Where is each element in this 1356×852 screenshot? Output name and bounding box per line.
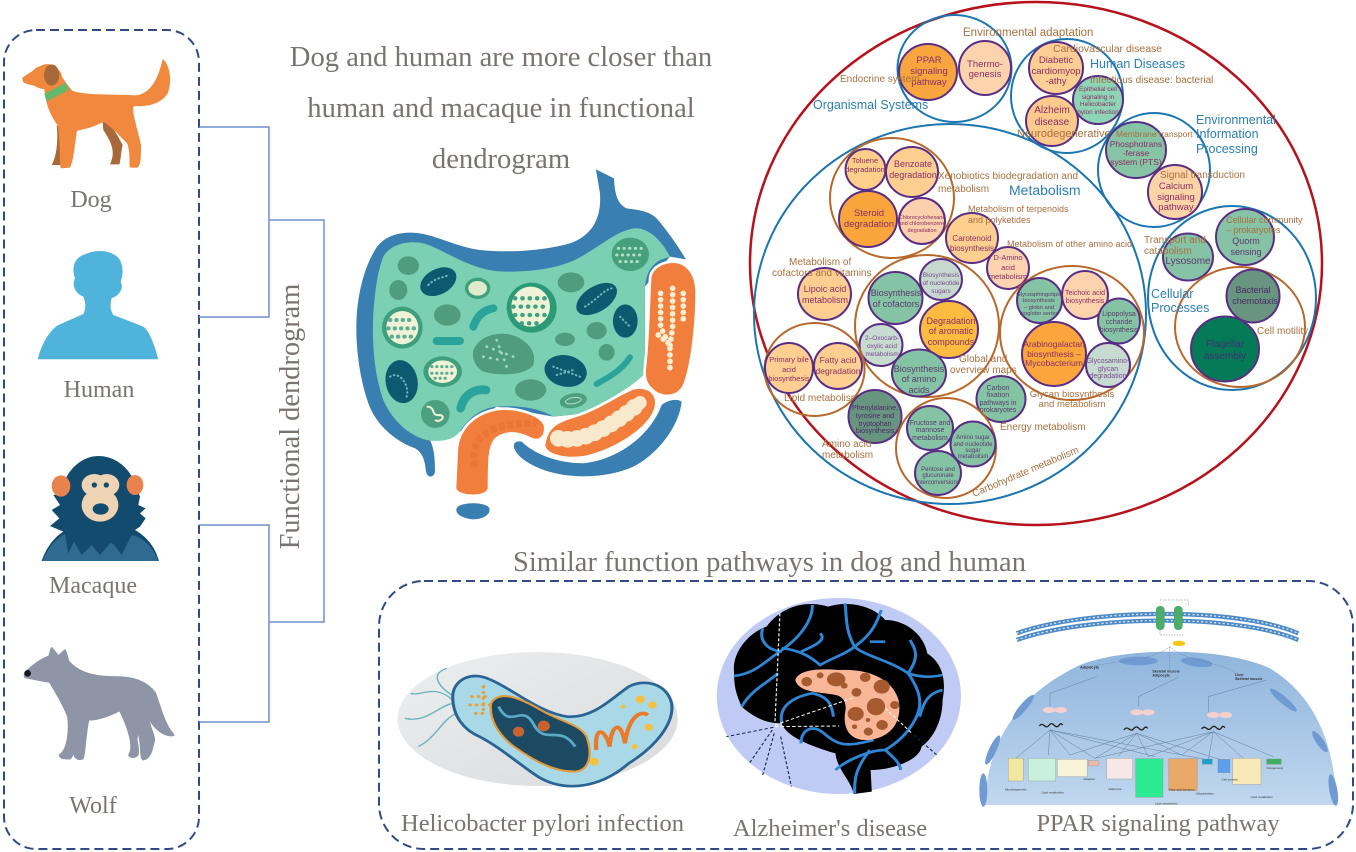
sub-group: global and overview maps: sugars (931, 288, 952, 295)
group: cellular processes: Quorm (1232, 236, 1260, 246)
sub-group: terpenoids and other amino acids: Metabolism of terpenoids (968, 204, 1069, 214)
sub-group: cofactors and vitamins: Lipoic acid (804, 284, 846, 294)
group: human diseases: Neurodegenerative (1017, 128, 1111, 140)
sub-group: carbohydrate metabolism: glucuronate (922, 473, 954, 479)
group: human diseases: Diabetic (1039, 55, 1073, 66)
group: organismal systems: Organismal Systems (813, 98, 928, 112)
group: cellular processes: Cell motility (1257, 326, 1308, 337)
sub-group: amino acid metabolism: metabolism (822, 450, 873, 461)
heading: similar function pathways: Similar function pathways in dog and human (513, 547, 1026, 578)
sub-group: terpenoids and other amino acids: Metabolism of other amino acid (1007, 239, 1132, 249)
sub-group: global and overview maps: Degradation (926, 316, 976, 326)
group: cellular processes (1144, 206, 1316, 390)
sub-group: glycan biosynthesis and metabolism: biosynthesis (1100, 327, 1139, 334)
sub-group: xenobiotics: degradation (889, 170, 937, 180)
group: environmental information processing: Membrane transport (1116, 129, 1193, 139)
group: cellular processes: catabolism (1144, 246, 1192, 257)
group: organismal systems: pathway (911, 77, 947, 88)
sub-group: carbohydrate metabolism: Fructose and (910, 420, 951, 427)
illustration: PPAR signaling pathway: Microbiogenesis (1005, 788, 1027, 792)
sub-group: terpenoids and other amino acids: Carotenoid (952, 234, 992, 243)
sub-group: glycan biosynthesis and metabolism: ccharide (1106, 319, 1132, 326)
title: dendrogram (432, 144, 570, 175)
illustration: PPAR signaling pathway: Adipocyte (1152, 674, 1170, 678)
illustration: PPAR signaling pathway: Adipocyte (1080, 664, 1100, 669)
sub-group: glycan biosynthesis and metabolism: – globo and (1024, 305, 1054, 311)
label: Wolf: Wolf (69, 793, 117, 819)
sub-group: amino acid metabolism: Amino acid (822, 439, 871, 450)
sub-group: amino acid metabolism: biosynthesis (856, 428, 895, 435)
sub-group: carbohydrate metabolism: Carbohydrate metabolism (971, 445, 1081, 500)
sub-group: amino acid metabolism (822, 390, 902, 461)
group: environmental information processing: system (PTS) (1110, 157, 1162, 167)
sub-group: terpenoids and other amino acids: D-Amino (993, 253, 1023, 262)
icon: macaque (42, 456, 159, 561)
illustration: Helicobacter pylori (398, 652, 678, 786)
sub-group: glycan biosynthesis and metabolism: glycan (1098, 366, 1118, 373)
label: Functional dendrogram: Functional dendrogram (275, 284, 306, 549)
sub-group: global and overview maps: compounds (928, 337, 975, 347)
group: human diseases: signaling in (1082, 94, 1115, 101)
sub-group: global and overview maps: overview maps (950, 365, 1017, 376)
group: human diseases: Human Diseases (1090, 57, 1185, 71)
sub-group: amino acid metabolism: tryptophan (858, 421, 892, 428)
sub-group: global and overview maps (855, 255, 1017, 397)
sub-group: lipid metabolism (764, 323, 864, 416)
sub-group: cofactors and vitamins: Metabolism of (789, 257, 851, 268)
group: human diseases: -athy (1045, 76, 1067, 87)
sub-group: glycan biosynthesis and metabolism: Teichoic acid (1065, 290, 1105, 297)
sub-group: xenobiotics (830, 138, 1078, 258)
group: environmental information processing: Signal transduction (1160, 170, 1245, 181)
sub-group: global and overview maps: of aromatic (929, 326, 974, 336)
sub-group: carbohydrate metabolism: Pentose and (921, 467, 955, 473)
sub-group: glycan biosynthesis and metabolism: and metabolism (1038, 399, 1106, 410)
illustration: PPAR signaling pathway: Lipid metabolism (1155, 802, 1178, 806)
sub-group: carbohydrate metabolism: metabolism (912, 435, 948, 442)
illustration: PPAR signaling pathway (979, 600, 1340, 807)
sub-group: cofactors and vitamins: cofactors and vitamins (772, 268, 872, 279)
group: cellular processes: – prokaryotes (1226, 225, 1281, 235)
sub-group: lipid metabolism: Fatty acid (820, 355, 857, 365)
group: environmental information processing: -ferase (1123, 148, 1149, 158)
group: organismal systems: PPAR (916, 55, 942, 66)
sub-group: glycan biosynthesis and metabolism: biosynthesis (1066, 298, 1105, 305)
illustration: PPAR signaling pathway: Liver (1235, 673, 1244, 677)
sub-group: lipid metabolism: acid (782, 365, 796, 374)
sub-group: lipid metabolism: biosynthesis (768, 374, 810, 383)
group: environmental information processing: Information (1196, 127, 1259, 141)
sub-group: xenobiotics: Chlorocyclohexane (899, 215, 945, 221)
illustration: Alzheimer's brain (717, 598, 961, 794)
label: Helicobacter pylori infection: Helicobacter pylori infection (401, 810, 684, 837)
sub-group: glycan biosynthesis and metabolism: Glycosamino- (1087, 358, 1130, 365)
group: environmental information processing (1098, 113, 1276, 227)
sub-group: glycan biosynthesis and metabolism: Arabinogalactan (1023, 339, 1085, 349)
sub-group: glycan biosynthesis and metabolism: biosynthesis (1023, 298, 1055, 304)
illustration: PPAR signaling pathway: Lipid metabolism (1251, 795, 1274, 799)
group: cellular processes: Bacterial (1235, 285, 1271, 295)
group: environmental information processing: Environmental (1196, 113, 1276, 127)
sub-group: glycan biosynthesis and metabolism: biosynthesis – (1027, 349, 1081, 359)
sub-group: carbohydrate metabolism: sugar (965, 448, 981, 454)
group: cellular processes: Lysosome (1165, 256, 1211, 267)
sub-group: global and overview maps: 2–Oxocarb- (865, 335, 899, 342)
icon: human (38, 251, 158, 359)
sub-group: energy metabolism: fixation (987, 392, 1009, 399)
label: Human: Human (64, 377, 134, 403)
group: metabolism: Metabolism (1009, 182, 1081, 198)
sub-group: glycan biosynthesis and metabolism: isoglobo series (1020, 311, 1058, 317)
sub-group: carbohydrate metabolism: and nucleotide (953, 442, 993, 448)
sub-group: energy metabolism: pathways in (980, 400, 1017, 407)
group: human diseases: pylori infection (1077, 109, 1119, 116)
sub-group: glycan biosynthesis and metabolism: Glycan biosynthesis (1030, 389, 1114, 400)
illustration: PPAR signaling pathway: Fatty acid transport (1169, 787, 1195, 791)
sub-group: global and overview maps: of amino (902, 374, 936, 384)
sub-group: global and overview maps: Global and (959, 354, 1007, 365)
sub-group: amino acid metabolism: Phenylalanine, (852, 405, 898, 412)
group: human diseases: cardiomyop (1031, 66, 1081, 77)
sub-group: glycan biosynthesis and metabolism: Glycosphingolipid (1016, 292, 1062, 298)
sub-group: xenobiotics: Benzoate (894, 159, 932, 169)
illustration: PPAR signaling pathway: Cell survival (1222, 778, 1238, 782)
group: cellular processes: assembly (1204, 351, 1246, 362)
sub-group: glycan biosynthesis and metabolism: Mycobacterium (1025, 358, 1083, 368)
group: organismal systems (813, 15, 1093, 122)
illustration: PPAR signaling pathway: Adipocyte (1108, 787, 1122, 791)
icon: dog (23, 61, 169, 167)
group: cellular processes: chemotaxis (1232, 296, 1278, 306)
sub-group: lipid metabolism: Lipid metabolism (784, 393, 859, 404)
illustration: PPAR signaling pathway: Ketogenesis (1267, 766, 1284, 770)
sub-group: carbohydrate metabolism (896, 398, 1081, 500)
icon: wolf (24, 648, 173, 759)
sub-group: xenobiotics: and chlorobenzene (899, 221, 945, 227)
panel: pathways (379, 581, 1353, 849)
sub-group: terpenoids and other amino acids: metabolism (989, 272, 1027, 281)
group: organismal systems: Endocrine system (840, 74, 919, 85)
group: environmental information processing: Processing (1196, 142, 1258, 156)
sub-group: glycan biosynthesis and metabolism: degradation (1090, 373, 1127, 380)
sub-group: energy metabolism (976, 376, 1086, 433)
sub-group: xenobiotics: Xenobiotics biodegradation and (938, 171, 1078, 182)
group: human diseases: Cardiovascular disease (1053, 43, 1162, 55)
sub-group: xenobiotics: degradation (907, 228, 937, 234)
title: human and macaque in functional (307, 93, 695, 124)
sub-group: cofactors and vitamins: metabolism (802, 295, 848, 305)
group: human diseases: Helicobacter (1080, 101, 1117, 108)
chart: dendrogram (199, 127, 324, 722)
illustration: PPAR signaling pathway: Ubiquitination (1196, 791, 1214, 795)
group: human diseases: disease (1035, 117, 1070, 128)
sub-group: terpenoids and other amino acids: acid (1001, 263, 1015, 272)
sub-group: global and overview maps: acids (908, 385, 930, 395)
illustration: PPAR signaling pathway: Skeletal muscle (1152, 670, 1180, 674)
group: cellular processes: Cellular community (1226, 215, 1303, 225)
label: Dog: Dog (70, 187, 112, 213)
group: human diseases (1011, 39, 1213, 153)
sub-group: carbohydrate metabolism: metabolism (958, 454, 988, 460)
sub-group: terpenoids and other amino acids: biosynthesis (950, 244, 994, 253)
group: cellular processes: Processes (1151, 301, 1209, 315)
sub-group: carbohydrate metabolism: Amino sugar (956, 435, 990, 441)
sub-group: lipid metabolism: Primary bile (769, 355, 809, 364)
sub-group: lipid metabolism: degradation (816, 366, 861, 376)
sub-group: carbohydrate metabolism: interconversions (916, 480, 960, 486)
title: Dog and human are more closer than (290, 42, 712, 73)
chart: function pathway circle packing (750, 2, 1322, 525)
sub-group: global and overview maps: Biosynthesis (894, 364, 945, 374)
sub-group: energy metabolism: Carbon (987, 385, 1010, 392)
group: cellular processes: sensing (1230, 247, 1262, 257)
sub-group: global and overview maps: Biosynthesis (923, 272, 960, 279)
illustration: PPAR signaling pathway: Skeletal muscle (1235, 677, 1262, 681)
group: environmental information processing: Calcium (1159, 181, 1193, 192)
group: environmental information processing: signaling (1157, 192, 1195, 203)
sub-group: xenobiotics: degradation (844, 219, 894, 230)
group: organismal systems: Environmental adaptation (963, 27, 1093, 39)
label: Alzheimer's disease: Alzheimer's disease (733, 815, 927, 842)
sub-group: global and overview maps: of cofactors (873, 299, 920, 309)
group: human diseases: Epithelial cell (1079, 86, 1118, 93)
illustration: PPAR signaling pathway: Lipid metabolism (1042, 790, 1065, 794)
sub-group: xenobiotics: Steroid (854, 208, 884, 219)
sub-group: energy metabolism: prokaryotes (980, 407, 1017, 414)
group: cellular processes: Cellular (1151, 287, 1193, 301)
group: human diseases: Alzheim (1034, 105, 1070, 116)
sub-group: global and overview maps: Biosynthesis (871, 288, 922, 298)
sub-group: xenobiotics: metabolism (938, 184, 989, 195)
sub-group: glycan biosynthesis and metabolism: Lipopolysa (1102, 311, 1136, 318)
group: organismal systems: genesis (969, 69, 1002, 80)
illustration: PPAR signaling pathway: Adaptive (1083, 777, 1095, 781)
group: environmental information processing: pathway (1158, 202, 1194, 213)
sub-group: global and overview maps: oxylic acid (867, 343, 897, 350)
sub-group: cofactors and vitamins (772, 257, 872, 320)
title (290, 42, 712, 175)
group: metabolism (754, 124, 1146, 504)
sub-group: terpenoids and other amino acids: and polyketides (968, 215, 1031, 225)
group: human diseases: Infectious disease: bacterial (1090, 75, 1213, 86)
group: organismal systems: signaling (910, 66, 948, 77)
group: cellular processes: Transport and (1144, 235, 1206, 246)
sub-group: carbohydrate metabolism: mannose (916, 427, 945, 434)
sub-group: glycan biosynthesis and metabolism (1000, 266, 1144, 410)
panel: species (4, 30, 199, 849)
sub-group: amino acid metabolism: tyrosine and (856, 413, 894, 420)
sub-group: energy metabolism: Energy metabolism (1000, 422, 1086, 433)
sub-group: xenobiotics: degradation (845, 165, 885, 174)
sub-group: xenobiotics: Toluene (852, 156, 878, 165)
group: environmental information processing: Phosphotrans (1110, 139, 1162, 149)
sub-group: terpenoids and other amino acids (946, 204, 1132, 289)
group: organismal systems: Thermo- (967, 59, 1003, 70)
sub-group: global and overview maps: metabolism (865, 351, 899, 358)
illustration: gut (356, 169, 697, 519)
label: PPAR signaling pathway: PPAR signaling pathway (1036, 810, 1280, 837)
label: Macaque: Macaque (49, 573, 137, 599)
group: cellular processes: Flagellar (1206, 339, 1245, 350)
sub-group: global and overview maps: of nucleotide (923, 280, 960, 287)
